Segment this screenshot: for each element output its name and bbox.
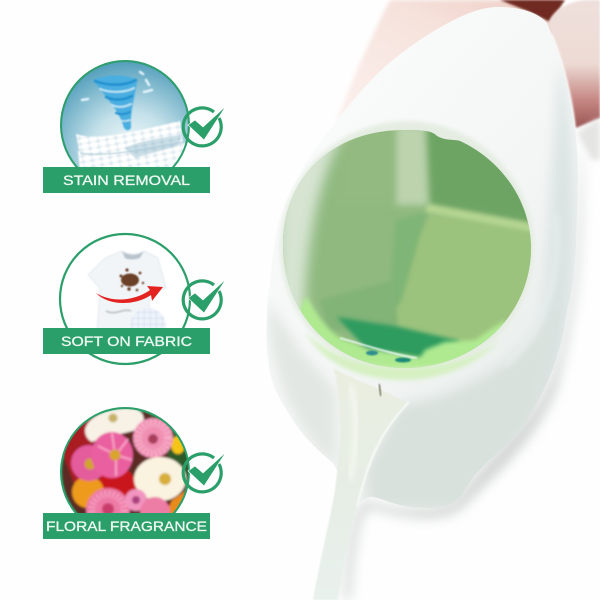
stain xyxy=(120,268,144,291)
icon: t-shirt with stain xyxy=(60,234,190,364)
fabric ball xyxy=(130,308,166,328)
banner: floral fragrance: FLORAL FRAGRANCE xyxy=(46,518,207,534)
bottle shadow xyxy=(344,130,582,600)
lower rim xyxy=(305,332,500,380)
quilted sheets xyxy=(76,121,186,170)
pink flower lower right xyxy=(138,496,172,513)
lime rim xyxy=(298,297,505,368)
blue dots xyxy=(366,350,378,356)
orange flower xyxy=(72,476,104,508)
banner: soft on fabric xyxy=(43,328,210,354)
icon: check badge xyxy=(183,279,226,319)
yellow flower xyxy=(171,436,185,454)
white cosmos xyxy=(134,457,186,501)
liquid stream xyxy=(313,368,409,600)
pink dahlia xyxy=(133,418,173,458)
pink flower bottom xyxy=(84,486,132,513)
liquid interior xyxy=(320,125,540,345)
feature: soft on fabric xyxy=(43,234,226,364)
hand behind bottle xyxy=(336,0,600,160)
feature: stain removal xyxy=(43,60,226,193)
white flower top xyxy=(85,408,144,442)
tornado xyxy=(82,72,152,130)
feature: floral fragrance xyxy=(43,407,226,539)
banner: soft on fabric: SOFT ON FABRIC xyxy=(61,333,192,349)
banner: stain removal xyxy=(43,167,210,193)
red arrow xyxy=(96,286,163,303)
icon: check badge xyxy=(183,106,226,146)
banner: floral fragrance xyxy=(43,513,210,539)
bottle opening xyxy=(278,120,557,380)
dark red flower xyxy=(98,470,137,497)
icon: flowers xyxy=(60,407,190,513)
pale left rim xyxy=(283,142,346,316)
t-shirt xyxy=(88,251,166,332)
small pink flower xyxy=(125,489,147,511)
icon: tornado over fabric xyxy=(60,60,190,167)
banner: stain removal: STAIN REMOVAL xyxy=(63,172,190,188)
bottle body xyxy=(260,0,590,520)
dark green band xyxy=(337,317,460,360)
icon: check badge xyxy=(183,452,226,492)
pink cosmos left xyxy=(71,445,107,481)
pink cosmos center xyxy=(91,432,133,478)
photo: detergent bottle pouring xyxy=(260,0,600,600)
